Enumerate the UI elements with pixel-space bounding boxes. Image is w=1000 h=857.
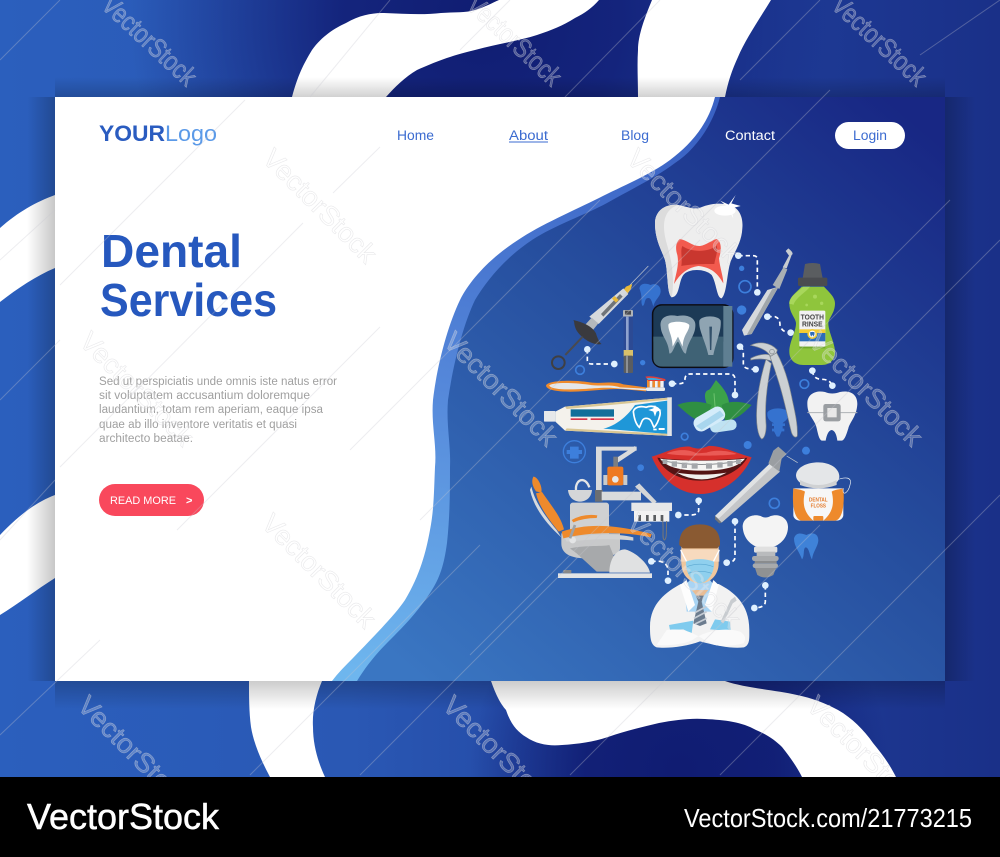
logo: YOUR [99, 121, 165, 146]
watermark overlay: VectorStock [256, 508, 382, 634]
decorative connectors upper [576, 252, 836, 440]
watermark overlay: VectorStock [801, 690, 927, 816]
panel: inner blue wave [357, 97, 945, 681]
icon: tooth cross-section [655, 195, 743, 298]
icons lower cluster [530, 441, 851, 648]
body text: quae ab illo inventore veritatis et quasi [99, 419, 297, 431]
watermark overlay: VectorStock [72, 690, 198, 816]
footer bar: VectorStock.com/21773215 [684, 803, 972, 833]
icon: mouth rinse bottle [789, 263, 835, 365]
icon: implant silhouette [767, 408, 788, 437]
icon: tooth with braces [807, 391, 857, 441]
icon: blue tooth silhouette small [794, 533, 818, 559]
card shadow [27, 77, 975, 709]
read more button [99, 484, 204, 516]
panel: blue hero background [332, 97, 945, 681]
watermark overlay: VectorStock [257, 143, 383, 269]
navigation menu [397, 128, 775, 143]
icon: dental chair [530, 446, 672, 578]
navigation menu: Blog [621, 128, 649, 143]
icon: dental floss: DENTAL [809, 497, 828, 503]
logo [99, 121, 217, 146]
watermark overlay: VectorStock [74, 326, 200, 452]
icon: mouth rinse bottle: TOOTH [801, 314, 824, 321]
login button [835, 122, 905, 149]
icon: x-ray [653, 305, 733, 367]
navigation menu: Contact [725, 128, 775, 143]
title: Services [100, 274, 277, 326]
body text: architecto beatae. [99, 433, 193, 445]
body text: laudantium, totam rem aperiam, eaque ipsa [99, 404, 324, 416]
icon: dental floss: FLOSS [811, 503, 826, 509]
icon: dentist [650, 524, 749, 648]
icon: mint gum [677, 380, 752, 434]
icon: anesthetic syringe [552, 266, 648, 369]
watermark overlay: VectorStock [438, 326, 564, 452]
icon: dental handpiece [715, 447, 798, 523]
watermark overlay: VectorStock [437, 690, 563, 816]
watermark overlay: VectorStock [621, 508, 747, 634]
footer bar [0, 777, 1000, 857]
body text [99, 376, 337, 445]
login button: Login [853, 128, 887, 143]
icon: mouth rinse bottle: RINSE [802, 322, 823, 329]
read more button: READ MORE [110, 495, 176, 507]
icon: toothbrush [546, 376, 665, 392]
main card [55, 97, 945, 681]
icons upper cluster [544, 195, 857, 441]
title [100, 225, 277, 326]
icon: smile with braces [652, 446, 752, 494]
footer bar: VectorStock [27, 796, 220, 837]
navigation menu: Home [397, 128, 434, 143]
logo: Logo [165, 121, 217, 146]
icon: ampoule [623, 310, 633, 373]
decorative connectors lower [563, 441, 810, 611]
icon: dental probe [742, 248, 793, 336]
read more button: > [186, 495, 192, 507]
navigation menu: About [509, 128, 548, 143]
icon: toothpaste [544, 397, 672, 436]
icon: blue tooth silhouette [639, 284, 661, 307]
title: Dental [101, 225, 242, 277]
icon: dental implant [743, 515, 788, 577]
watermark overlay: VectorStock [621, 143, 747, 269]
body text: sit voluptatem accusantium doloremque [99, 390, 310, 402]
watermark overlay: VectorStock [803, 326, 929, 452]
icon: dental floss [793, 462, 851, 521]
body text: Sed ut perspiciatis unde omnis iste natus error [99, 376, 337, 388]
icon: extraction forceps [751, 343, 797, 439]
